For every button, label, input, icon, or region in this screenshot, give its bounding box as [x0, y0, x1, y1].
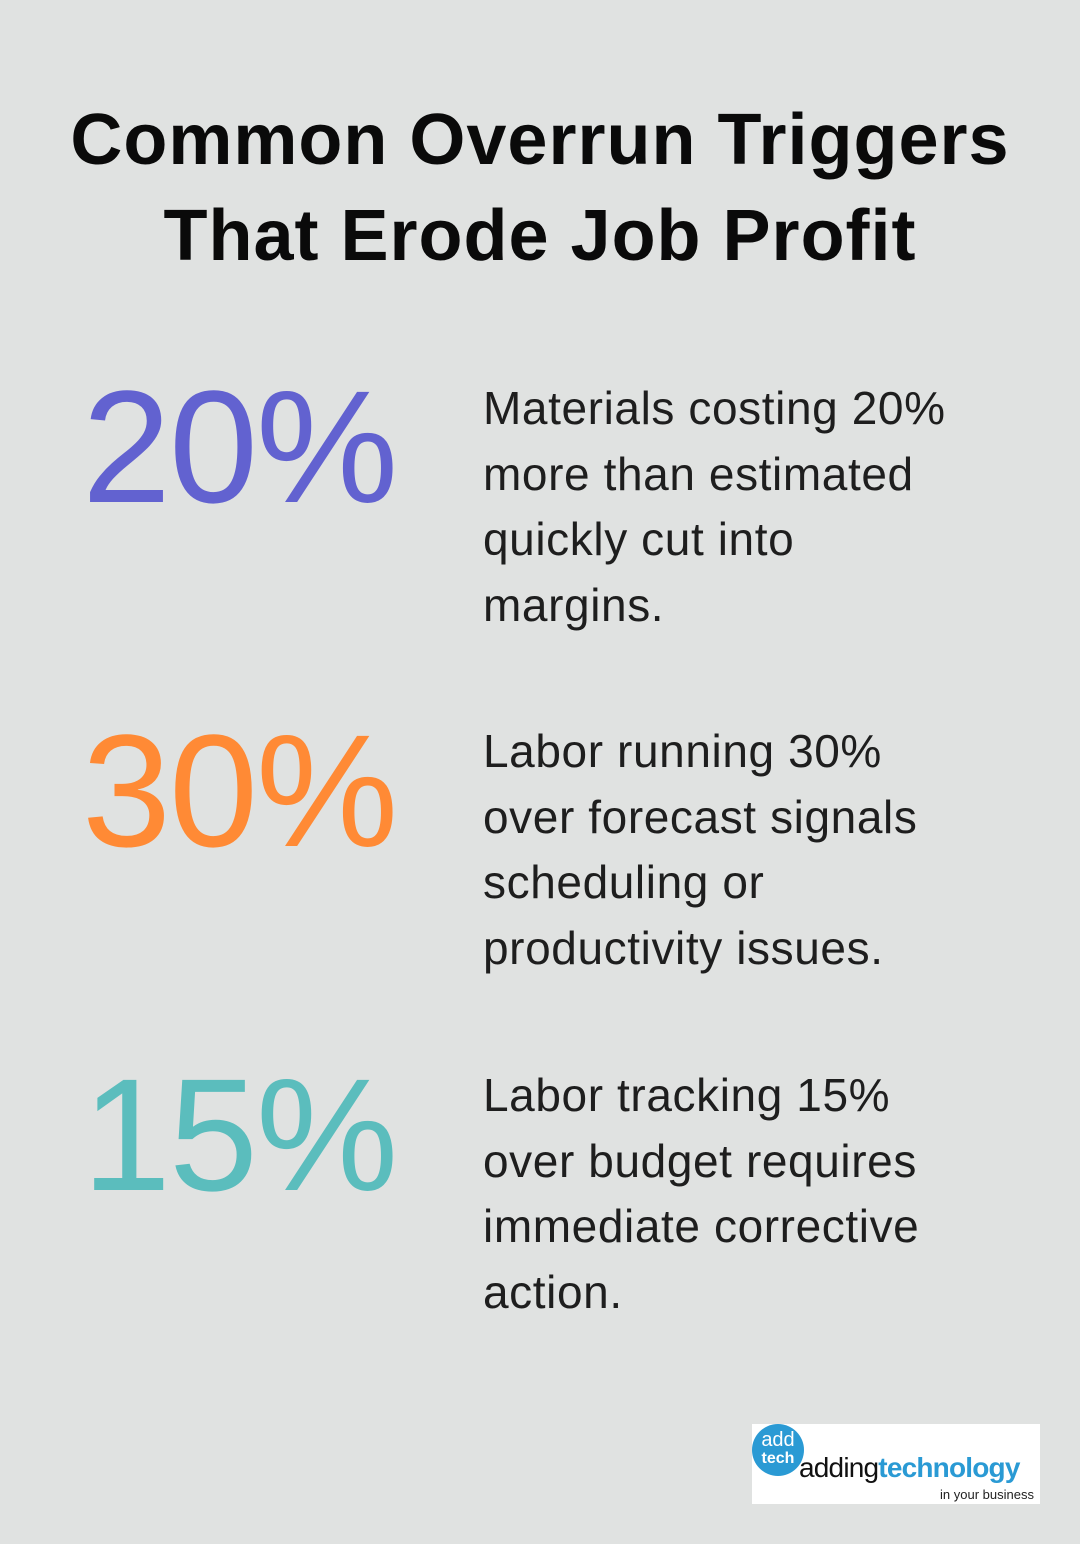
stat 2 text [483, 725, 917, 974]
stat 3 text: Labor tracking 15% [483, 1069, 890, 1121]
stat 2 text: Labor running 30% [483, 725, 882, 777]
logo wordmark: addingtechnology [799, 1452, 1020, 1483]
stat 3 number: 15% [82, 1045, 396, 1224]
stat 3 text [483, 1069, 919, 1318]
title [70, 100, 1010, 276]
logo icon circle: tech [762, 1450, 794, 1467]
title: Common Overrun Triggers [70, 100, 1010, 180]
logo icon circle [752, 1424, 804, 1476]
stat 1 text: Materials costing 20% [483, 382, 946, 434]
stat 2 text: over forecast signals [483, 790, 917, 842]
stat 3 text: action. [483, 1266, 623, 1318]
stat 2 number: 30% [82, 701, 396, 880]
stat 3 text: over budget requires [483, 1134, 917, 1186]
stat 1 text [483, 382, 946, 630]
stat 3 text: immediate corrective [483, 1200, 919, 1252]
stat 2 text: productivity issues. [483, 922, 884, 974]
stat 1 text: margins. [483, 578, 664, 630]
logo icon circle: add [761, 1429, 795, 1451]
stat 1 number: 20% [82, 357, 396, 536]
title: That Erode Job Profit [163, 196, 917, 276]
logo [752, 1424, 1040, 1504]
logo tagline: in your business [940, 1487, 1034, 1502]
stat 2 text: scheduling or [483, 856, 764, 908]
stat 1 text: more than estimated [483, 448, 914, 500]
stat 1 text: quickly cut into [483, 513, 794, 565]
